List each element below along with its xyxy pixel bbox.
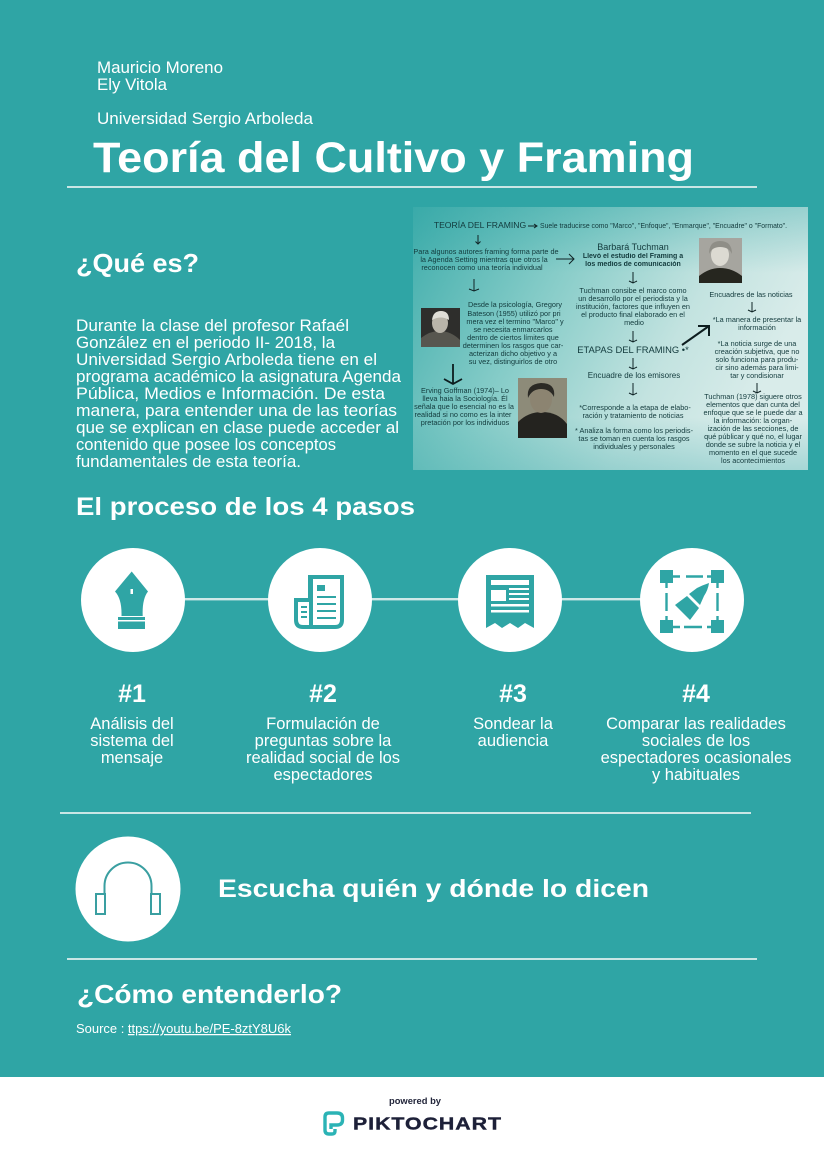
concept map: left column: acterizan dicho objetivo y a	[469, 349, 558, 358]
concept map: center column: un desarrollo por el periodista y la	[578, 294, 689, 303]
concept map: center column: *Corresponde a la etapa de elabo-	[579, 403, 691, 412]
step 1 text	[90, 680, 174, 767]
step 4 text: sociales de los	[642, 732, 750, 750]
piktochart logo: PIKTOCHART	[353, 1114, 502, 1134]
description paragraph: Durante la clase del profesor Rafaél	[76, 317, 349, 335]
authors and university: Universidad Sergio Arboleda	[97, 110, 314, 128]
concept map: right column: donde se subre la noticia y el	[706, 440, 801, 449]
concept map: right column: tar y condisionar	[730, 371, 784, 380]
concept map: right column: solo funciona para produ-	[716, 355, 799, 364]
concept map: right column: información	[738, 323, 776, 332]
concept map: right column	[704, 290, 803, 465]
description paragraph: que se explican en clase puede acceder al	[76, 419, 399, 437]
description paragraph: programa académico la asignatura Agenda	[76, 368, 402, 386]
concept map: left column: Desde la psicología, Gregory	[468, 300, 562, 309]
description paragraph: González en el periodo II- 2018, la	[76, 334, 336, 352]
concept map: right column: ización de las secciones, de	[708, 424, 798, 433]
step 2 text	[246, 680, 400, 784]
concept map: left column: realidad si no como es la inter	[415, 410, 512, 419]
concept map: left column: lleva haia la Sociología. Él	[422, 394, 508, 403]
step 2 text: espectadores	[273, 766, 373, 784]
piktochart logo	[325, 1113, 502, 1134]
concept map: left column: Suele traducirse como "Marco", "Enfoque", "Enmarque", "Encuadre" o "Formato".	[540, 221, 787, 230]
concept map: right column: qué públicar y qué no, el lugar	[704, 432, 802, 441]
concept map: center column: Barbará Tuchman	[597, 242, 669, 252]
concept map: center column: Llevó el estudio del Framing a	[583, 253, 683, 260]
concept map: right column: Encuadres de las noticias	[709, 290, 793, 299]
step 3 text	[473, 680, 554, 750]
concept map: right column: creación subjetiva, que no	[715, 347, 799, 356]
step 3 text: Sondear la	[473, 715, 554, 733]
concept map: left column: Erving Goffman (1974)– Lo	[421, 386, 509, 395]
concept map: left column: reconocen como una teoría individual	[421, 263, 543, 272]
step 3 text: #3	[499, 680, 527, 708]
description paragraph: Pública, Medios e Información. De esta	[76, 385, 386, 403]
step 2 text: realidad social de los	[246, 749, 400, 767]
step 1 text: Análisis del	[90, 715, 174, 733]
step 2 text: Formulación de	[266, 715, 380, 733]
concept map: left column: TEORÍA DEL FRAMING	[434, 220, 526, 230]
step 4 text: y habituales	[652, 766, 740, 784]
concept map: right column: elementos que dan cunta del	[706, 400, 800, 409]
concept map: right column: *La noticia surge de una	[718, 339, 797, 348]
heading: Escucha: Escucha quién y dónde lo dicen	[218, 875, 649, 903]
concept map: center column: medio	[624, 318, 644, 327]
step 4 text: Comparar las realidades	[606, 715, 786, 733]
concept map: center column: tas se toman en cuenta los rasgos	[578, 434, 690, 443]
concept map: left column: la Agenda Setting mientras que otros la	[420, 255, 549, 264]
concept map: center column: * Analiza la forma como los periodis-	[575, 426, 694, 435]
powered by label: powered by	[389, 1096, 442, 1107]
concept map: right column: *La manera de presentar la	[713, 315, 802, 324]
footer	[0, 1077, 824, 1156]
step 1 icon: fountain pen nib	[81, 548, 185, 652]
concept map: left column: se necesita enmarcarlos	[473, 325, 553, 334]
source link: Source : ttps://youtu.be/PE-8ztY8U6k	[76, 1022, 292, 1036]
concept map: center column	[575, 242, 709, 451]
concept map: right column: Tuchman (1978) siguere otros	[704, 392, 802, 401]
description paragraph	[76, 317, 402, 471]
heading: Qué es: ¿Qué es?	[76, 248, 199, 278]
heading: Cómo entenderlo: ¿Cómo entenderlo?	[77, 979, 342, 1009]
photo: Erving Goffman	[518, 378, 567, 438]
concept map: right column: momento en el que sucede	[709, 448, 797, 457]
concept map: center column: Tuchman consibe el marco como	[579, 286, 687, 295]
concept map: left column: señala que lo esencial no es la	[414, 402, 515, 411]
step 1 text: #1	[118, 680, 146, 708]
step 4 icon: paintbrush in selection frame	[640, 548, 744, 652]
concept map: center column: Encuadre de los emisores	[588, 371, 680, 380]
authors and university	[97, 59, 314, 128]
description paragraph: Universidad Sergio Arboleda tiene en el	[76, 351, 377, 369]
step 4 text	[601, 680, 791, 784]
panel: framing concept map	[413, 207, 808, 470]
concept map: center column: el producto final elaborado en el	[581, 310, 685, 319]
photo: Gregory Bateson	[421, 308, 460, 347]
concept map: right column: los acontecimientos	[721, 456, 785, 465]
authors and university: Ely Vitola	[97, 76, 168, 94]
concept map: left column: su vez, distinguirlos de otro	[469, 357, 557, 366]
step 1 text: sistema del	[90, 732, 174, 750]
step 4 text: espectadores ocasionales	[601, 749, 791, 767]
icon: headphones	[76, 836, 180, 942]
description paragraph: fundamentales de esta teoría.	[76, 453, 301, 471]
concept map: center column: ETAPAS DEL FRAMING •*	[577, 344, 689, 355]
concept map: center column: individuales y personales	[593, 442, 675, 451]
step 3 icon: news receipt	[458, 548, 562, 652]
concept map: left column: mera vez el termino "Marco" y	[466, 317, 564, 326]
concept map: left column: dentro de ciertos límites que	[467, 333, 559, 342]
concept map: left column	[413, 220, 787, 427]
concept map: center column: ración y tratamiento de noticias	[582, 411, 684, 420]
step 2 text: #2	[309, 680, 337, 708]
concept map: right column: la información: la organ-	[714, 416, 793, 425]
step 3 text: audiencia	[478, 732, 549, 750]
photo: Barbara Tuchman	[699, 238, 742, 283]
step 4 text: #4	[682, 680, 710, 708]
title: Teoría del Cultivo y Framing	[93, 134, 694, 182]
concept map: right column: enfoque que se le puede dar a	[704, 408, 803, 417]
step 2 icon: newspaper	[268, 548, 372, 652]
heading: process: El proceso de los 4 pasos	[76, 493, 415, 521]
concept map: right column: cir sino además para limi-	[715, 363, 799, 372]
concept map: center column: los medios de comunicación	[585, 261, 681, 268]
step 2 text: preguntas sobre la	[255, 732, 392, 750]
description paragraph: contenido que posee los conceptos	[76, 436, 336, 454]
concept map: center column: institución, factores que influyen en	[576, 302, 690, 311]
description paragraph: manera, para entender una de las teorías	[76, 402, 397, 420]
concept map: left column: Para algunos autores framing forma parte de	[413, 247, 559, 256]
concept map: left column: Bateson (1955) utilizó por pri	[467, 309, 561, 318]
concept map: left column: determinen los rasgos que car-	[463, 341, 564, 350]
concept map: left column: pretación por los individuos	[421, 418, 510, 427]
authors and university: Mauricio Moreno	[97, 59, 223, 77]
step 1 text: mensaje	[101, 749, 163, 767]
